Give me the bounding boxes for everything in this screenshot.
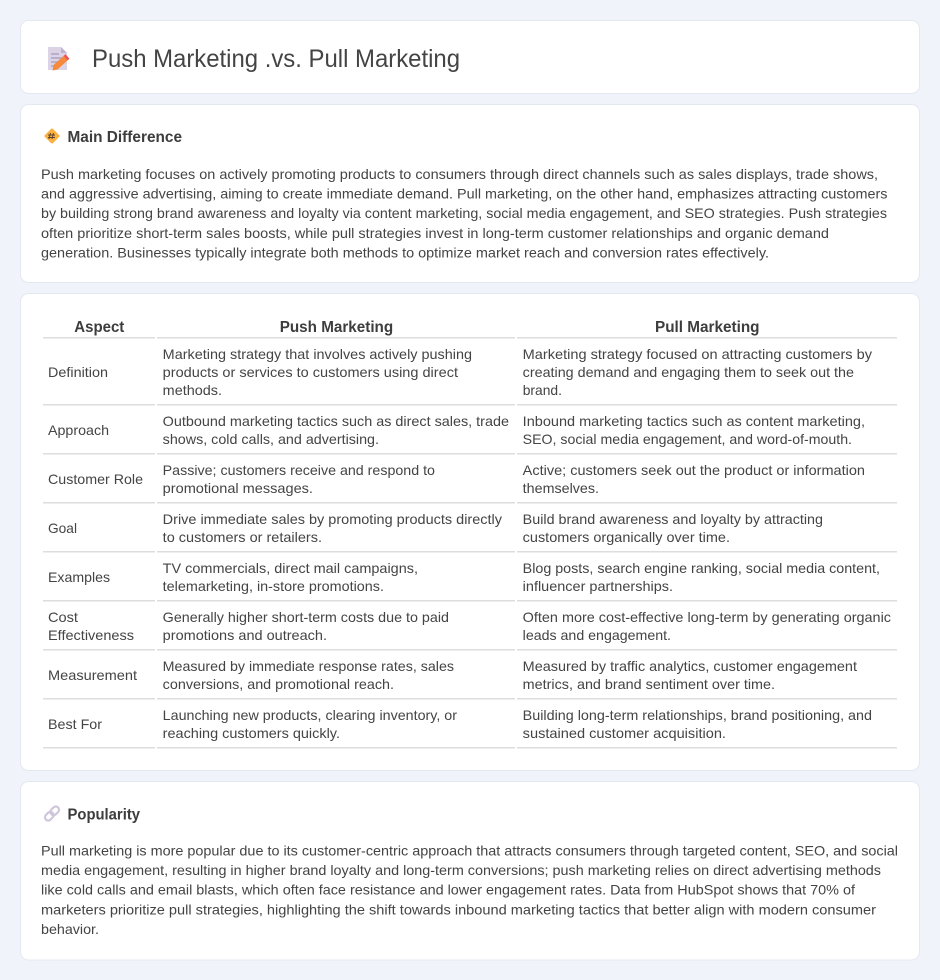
text block: popularity paragraph: media engagement, resulting in higher brand loyalty and long-term conversions; push marketing relies on direct advertising methods: [41, 862, 881, 878]
row: goal: Goal: [48, 520, 77, 536]
panel: popularity: [20, 782, 920, 960]
row: goal: customers organically over time.: [523, 529, 730, 545]
row: definition: methods.: [163, 382, 222, 398]
row: measurement: [43, 658, 897, 700]
row: cost effectiveness: Often more cost-effective long-term by generating organic: [523, 609, 891, 625]
row: cost effectiveness: Effectiveness: [48, 627, 134, 643]
row: cost effectiveness: leads and engagement.: [523, 627, 671, 643]
row: customer role: themselves.: [523, 480, 599, 496]
row: definition: brand.: [523, 382, 562, 398]
row: examples: [43, 560, 897, 602]
row: cost effectiveness: Cost: [48, 609, 78, 625]
row: approach: shows, cold calls, and advertising.: [163, 431, 379, 447]
row: measurement: Measured by traffic analytics, customer engagement: [523, 658, 857, 674]
row: customer role: [43, 462, 897, 504]
text block: main difference paragraph: often prioritize short-term sales boosts, while pull strategies invest in long-term customer relationships and organic demand: [41, 225, 829, 241]
row: examples: influencer partnerships.: [523, 578, 673, 594]
table header row: Aspect: [74, 319, 125, 336]
text block: main difference paragraph: by building strong brand awareness and loyalty via content marketing, social media engagement, and SEO strategies. Push strategies: [41, 205, 887, 221]
text block: popularity paragraph: marketers prioritize pull strategies, highlighting the shift towards inbound marketing tactics that better align with modern consumer: [41, 901, 876, 917]
heading: popularity: Popularity: [68, 806, 140, 824]
text block: main difference paragraph: and aggressive advertising, aiming to create immediate demand. Pull marketing, on the other hand, emphasizes attracting customers: [41, 186, 888, 202]
row: best for: [43, 707, 897, 748]
text block: popularity paragraph: like cold calls and email blasts, which often face resistance and lower engagement rates. Data from HubSpot shows that 70% of: [41, 882, 855, 898]
row: measurement: metrics, and brand sentiment over time.: [523, 676, 775, 692]
row: definition: [43, 346, 897, 406]
row: definition: Marketing strategy focused on attracting customers by: [523, 346, 872, 362]
text block: main difference paragraph: [41, 166, 888, 260]
row: examples: Blog posts, search engine ranking, social media content,: [523, 560, 880, 576]
panel: main difference: [20, 104, 920, 282]
text block: main difference paragraph: generation. Businesses typically integrate both methods to optimize market reach and conversion rates effectively.: [41, 244, 769, 260]
title: Push Marketing .vs. Pull Marketing: [92, 45, 460, 73]
table header row: Push Marketing: [280, 319, 393, 336]
text block: popularity paragraph: [41, 842, 898, 937]
row: best for: Building long-term relationships, brand positioning, and: [523, 707, 872, 723]
row: examples: Examples: [48, 569, 110, 585]
table header row: Pull Marketing: [655, 319, 760, 336]
row: definition: creating demand and engaging them to seek out the: [523, 364, 854, 380]
row: cost effectiveness: promotions and outreach.: [163, 627, 327, 643]
row: definition: Definition: [48, 364, 108, 380]
row: measurement: conversions, and promotional reach.: [163, 676, 394, 692]
text block: popularity paragraph: Pull marketing is more popular due to its customer-centric approach that attracts consumers through targeted content, SEO, and social: [41, 842, 898, 858]
row: approach: Outbound marketing tactics such as direct sales, trade: [163, 413, 509, 429]
table header row: [43, 319, 897, 338]
row: goal: Build brand awareness and loyalty by attracting: [523, 511, 823, 527]
row: customer role: promotional messages.: [163, 480, 313, 496]
row: definition: products or services to customers using direct: [163, 364, 458, 380]
row: measurement: Measured by immediate response rates, sales: [163, 658, 454, 674]
row: best for: sustained customer acquisition.: [523, 725, 726, 741]
text block: main difference paragraph: Push marketing focuses on actively promoting products to consumers through direct channels such as sales displays, trade shows,: [41, 166, 878, 182]
text block: popularity paragraph: behavior.: [41, 921, 99, 937]
row: best for: reaching customers quickly.: [163, 725, 340, 741]
icon: chain link: [44, 805, 60, 822]
row: best for: Best For: [48, 716, 102, 732]
row: approach: [43, 413, 897, 454]
heading: main difference: Main Difference: [68, 129, 182, 146]
row: goal: [43, 511, 897, 552]
row: goal: to customers or retailers.: [163, 529, 322, 545]
row: best for: Launching new products, clearing inventory, or: [163, 707, 457, 723]
row: approach: Inbound marketing tactics such as content marketing,: [523, 413, 865, 429]
row: measurement: Measurement: [48, 667, 137, 683]
icon: document with pencil: [48, 47, 70, 70]
row: goal: Drive immediate sales by promoting products directly: [163, 511, 502, 527]
row: approach: Approach: [48, 422, 109, 438]
row: cost effectiveness: [43, 609, 897, 650]
row: customer role: Passive; customers receive and respond to: [163, 462, 435, 478]
row: cost effectiveness: Generally higher short-term costs due to paid: [163, 609, 449, 625]
panel: header: [20, 20, 920, 94]
row: examples: telemarketing, in-store promotions.: [163, 578, 384, 594]
panel: comparison table: [20, 294, 920, 770]
row: approach: SEO, social media engagement, and word-of-mouth.: [523, 431, 852, 447]
row: definition: Marketing strategy that involves actively pushing: [163, 346, 472, 362]
icon: orange diamond sign: [44, 128, 60, 144]
row: customer role: Customer Role: [48, 471, 143, 487]
row: customer role: Active; customers seek out the product or information: [523, 462, 865, 478]
row: examples: TV commercials, direct mail campaigns,: [163, 560, 418, 576]
